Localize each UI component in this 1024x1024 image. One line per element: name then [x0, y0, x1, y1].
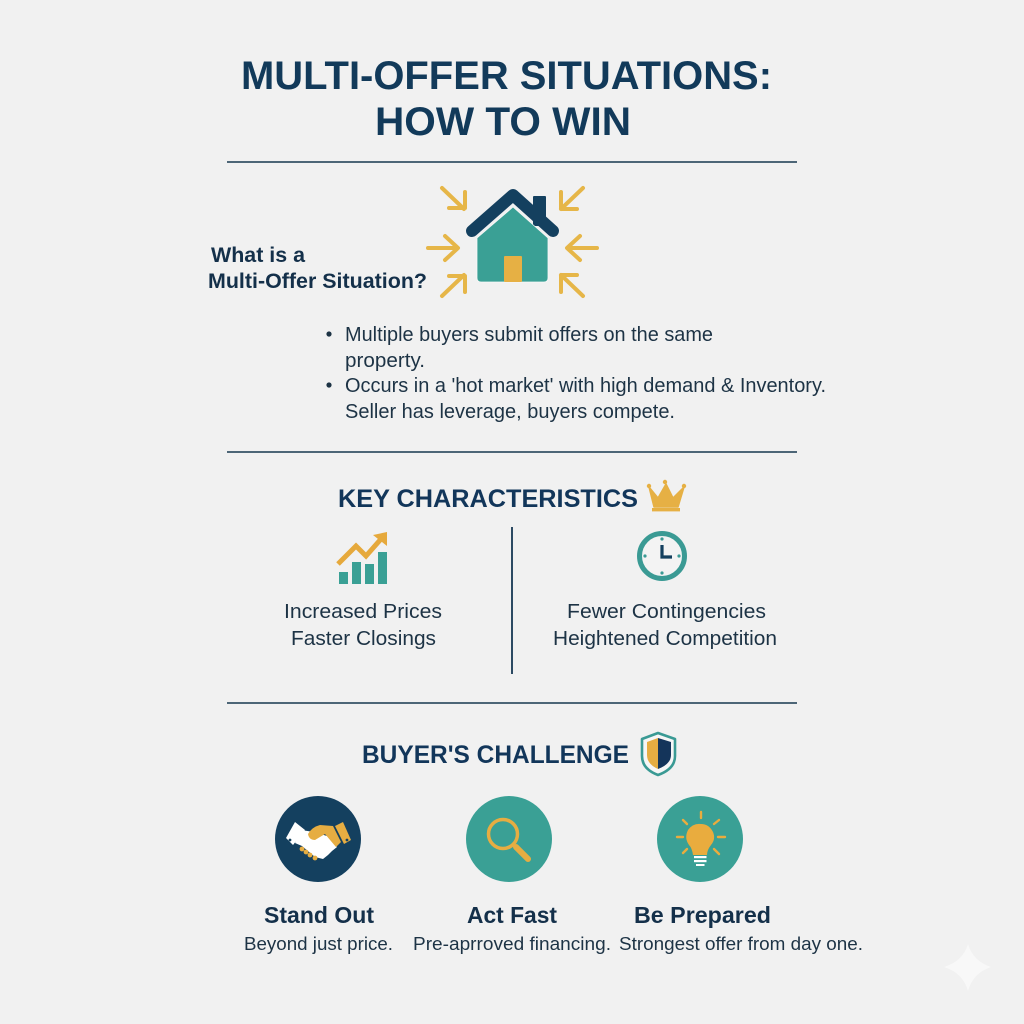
icon: clock [640, 534, 684, 578]
text block: definition bullets: property. [345, 350, 425, 372]
icon: shield [642, 733, 675, 775]
icon: house with converging arrows [428, 188, 597, 296]
text: left characteristics [284, 601, 442, 650]
text: be prepared [619, 902, 863, 954]
text: right characteristics: Fewer Contingencies [567, 601, 766, 623]
icon: house chimney [533, 196, 546, 226]
text: left characteristics: Faster Closings [291, 628, 436, 650]
heading: key characteristics: KEY CHARACTERISTICS [338, 485, 638, 513]
icon: rising bar chart [338, 532, 387, 584]
icon: crown [647, 480, 686, 511]
text: right characteristics [553, 601, 777, 650]
text: left characteristics: Increased Prices [284, 601, 442, 623]
text block: definition bullets: Multiple buyers submit offers on the same [345, 324, 713, 346]
title [241, 54, 772, 144]
icon: white hand [295, 830, 337, 859]
heading: buyer's challenge: BUYER'S CHALLENGE [362, 741, 629, 769]
icon: house door [504, 256, 522, 282]
icon: light bulb badge [657, 796, 743, 882]
heading: what is a multi-offer situation: What is a [211, 243, 306, 267]
text: be prepared: Strongest offer from day one. [619, 933, 863, 954]
text block: definition bullets: Occurs in a 'hot market' with high demand & Inventory. [345, 375, 826, 397]
text: act fast: Pre-aprroved financing. [413, 933, 611, 954]
icon: house body [477, 207, 548, 282]
text: act fast: Act Fast [467, 902, 557, 928]
title: MULTI-OFFER SITUATIONS: [241, 54, 772, 98]
divider: vertical [511, 527, 513, 674]
text: right characteristics: Heightened Competition [553, 628, 777, 650]
icon: arrows [428, 188, 597, 296]
icon: handshake badge [275, 796, 361, 882]
text: stand out: Stand Out [264, 902, 374, 928]
text block: definition bullets [326, 324, 826, 423]
title: HOW TO WIN [375, 100, 631, 144]
icon: house roof [472, 195, 553, 231]
text: be prepared: Be Prepared [634, 902, 771, 928]
text: stand out: Beyond just price. [244, 933, 393, 954]
icon: magnifier badge [466, 796, 552, 882]
icon: gold hand [308, 825, 341, 847]
heading: what is a multi-offer situation: Multi-Offer Situation? [208, 269, 427, 293]
text: stand out [244, 902, 393, 954]
text: act fast [413, 902, 611, 954]
heading: what is a multi-offer situation [208, 243, 427, 293]
icon: sparkle watermark [944, 944, 991, 991]
text block: definition bullets: Seller has leverage, buyers compete. [345, 401, 675, 423]
